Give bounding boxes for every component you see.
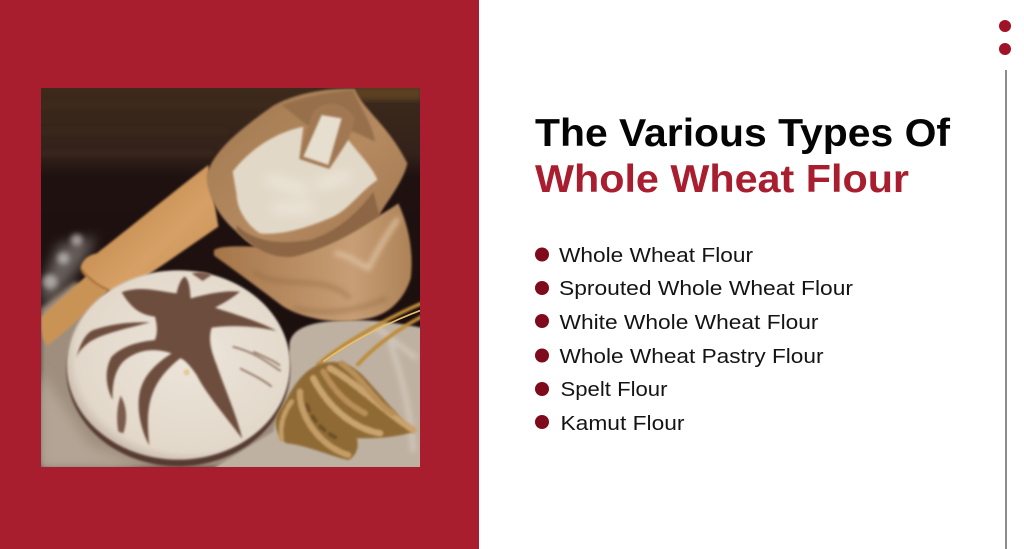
- photo background: dark wood: [40, 85, 422, 468]
- metal scoop: [300, 104, 354, 168]
- list item: White Whole Wheat Flour: White Whole Wheat Flour: [560, 311, 819, 334]
- bulleted list of flour types: [535, 244, 853, 435]
- flour heap: [233, 127, 377, 234]
- right vertical line: [1005, 70, 1007, 549]
- list item: Kamut Flour: Kamut Flour: [560, 412, 685, 435]
- wheat ears: [281, 363, 413, 455]
- wheat ear cluster shadow: [276, 362, 414, 460]
- wheat stalks and ears: [276, 303, 422, 460]
- round loaf with scored star: [66, 270, 290, 466]
- photo: bread, flour bags, rolling pin and wheat: [40, 85, 422, 468]
- title line 1: The Various Types Of: [535, 112, 951, 155]
- list item: Sprouted Whole Wheat Flour: Sprouted Whole Wheat Flour: [559, 277, 853, 300]
- top-right decorative dots: [999, 20, 1011, 55]
- list item: Whole Wheat Pastry Flour: Whole Wheat Pastry Flour: [560, 345, 824, 368]
- bag rim shadow: [237, 192, 379, 257]
- spilled flour: [42, 234, 97, 305]
- red side panel: [0, 0, 479, 549]
- title: [535, 112, 951, 201]
- title line 2: Whole Wheat Flour: [535, 158, 909, 201]
- list item: Whole Wheat Flour: Whole Wheat Flour: [559, 244, 753, 267]
- lower paper bag: [214, 203, 412, 321]
- rolling pin: [42, 165, 218, 346]
- linen cloth: [40, 282, 422, 468]
- upper paper bag with flour: [207, 89, 407, 257]
- list item: Spelt Flour: Spelt Flour: [560, 378, 668, 401]
- scored star pattern: [107, 277, 277, 446]
